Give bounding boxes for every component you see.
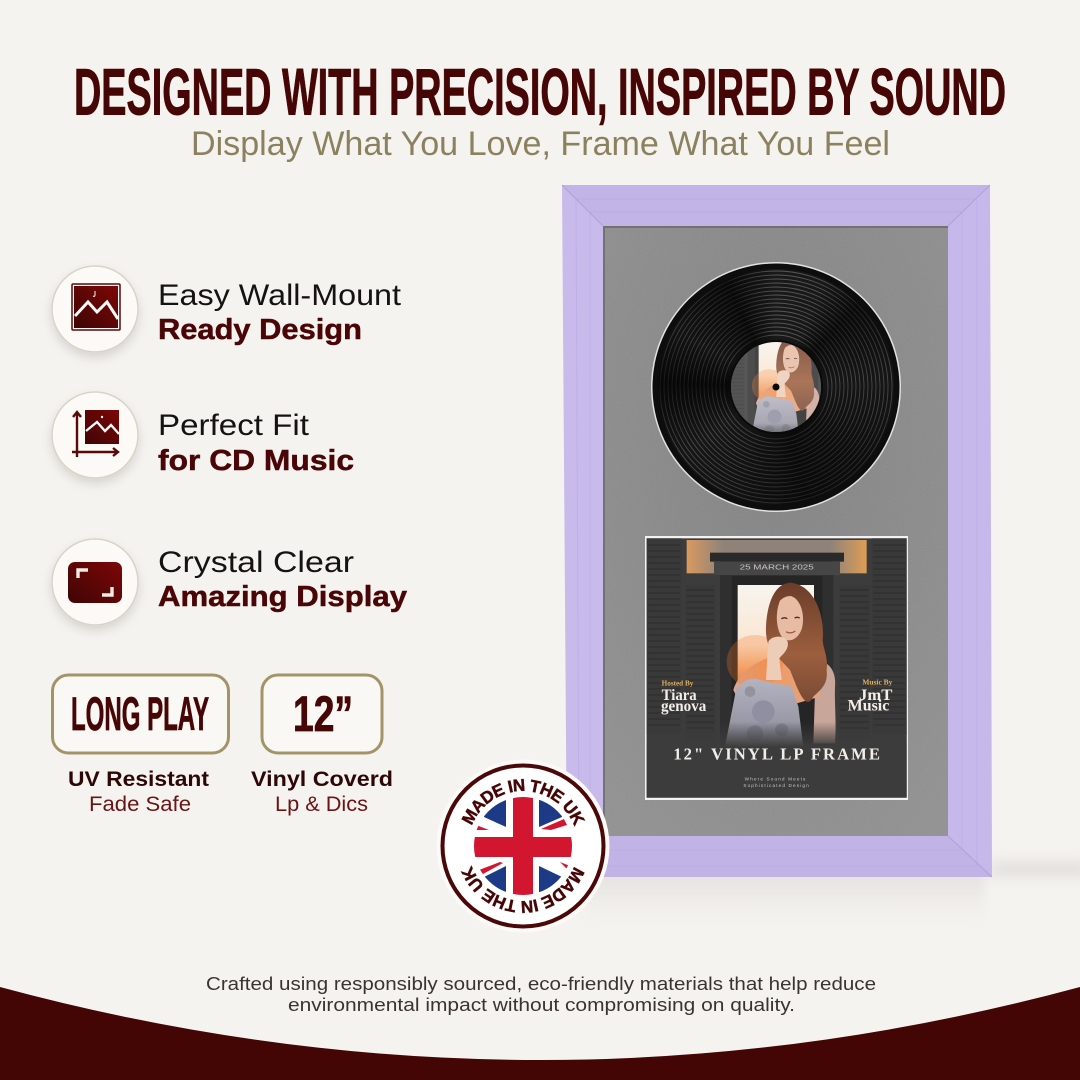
poster tagline (743, 776, 809, 788)
poster music by: JmT (859, 687, 892, 704)
poster hosted by: Hosted By (662, 679, 694, 687)
feature text: for CD Music (158, 445, 354, 477)
caption: uv resistant (68, 768, 209, 816)
feature text: Crystal Clear (158, 546, 354, 579)
caption: vinyl covered: Lp & Dics (275, 793, 368, 816)
badge: made in the uk (436, 760, 610, 932)
footer note (206, 974, 876, 1015)
caption: vinyl covered (251, 768, 393, 816)
caption: uv resistant: UV Resistant (68, 768, 209, 791)
feature text: Easy Wall-Mount (158, 279, 402, 312)
feature text (158, 546, 407, 613)
footer note: Crafted using responsibly sourced, eco-friendly materials that help reduce (206, 974, 876, 994)
subtitle: Display What You Love, Frame What You Feel (191, 125, 890, 163)
feature text: Perfect Fit (158, 409, 310, 442)
feature text (158, 409, 354, 477)
badge: 12 inch: 12” (293, 686, 353, 742)
poster tagline: Where Sound Meets (745, 776, 806, 781)
badge: 12 inch (262, 675, 382, 753)
poster music by: Music (848, 697, 890, 714)
grey mat board (603, 226, 948, 836)
badge text top: MADE IN THE UK (461, 778, 586, 827)
feature text: Ready Design (158, 314, 362, 346)
album poster (645, 536, 908, 800)
footer wave (0, 987, 1080, 1080)
poster title: 12" VINYL LP FRAME (673, 744, 880, 763)
poster hosted by: genova (661, 698, 707, 715)
icon: union flag (474, 797, 572, 895)
poster date: 25 MARCH 2025 (740, 562, 814, 571)
poster music by: Music By (862, 679, 893, 687)
icon: wall-mount picture (52, 266, 138, 352)
product: lavender picture frame (562, 185, 992, 877)
frame moulding (562, 185, 992, 877)
vinyl record (651, 262, 901, 512)
feature text (158, 279, 402, 346)
feature: crystal clear (52, 539, 407, 625)
feature text: Amazing Display (158, 581, 407, 613)
caption: uv resistant: Fade Safe (89, 793, 191, 816)
feature: perfect fit (52, 392, 354, 478)
feature: easy wall-mount (52, 266, 402, 352)
badge: long play: LONG PLAY (71, 687, 209, 740)
caption: vinyl covered: Vinyl Coverd (251, 768, 393, 791)
icon: full-screen display (52, 539, 138, 625)
poster hosted by (661, 679, 707, 715)
badge: long play (52, 675, 228, 753)
badge text bottom: MADE IN THE UK (460, 865, 585, 914)
poster tagline: Sophisticated Design (743, 783, 809, 788)
record label photo (731, 342, 821, 432)
poster hosted by: Tiara (662, 687, 697, 704)
footer note: environmental impact without compromising on quality. (288, 995, 795, 1015)
floor shadow and reflection (585, 862, 1080, 937)
icon: size arrows with picture (52, 392, 138, 478)
poster music by (848, 679, 893, 714)
